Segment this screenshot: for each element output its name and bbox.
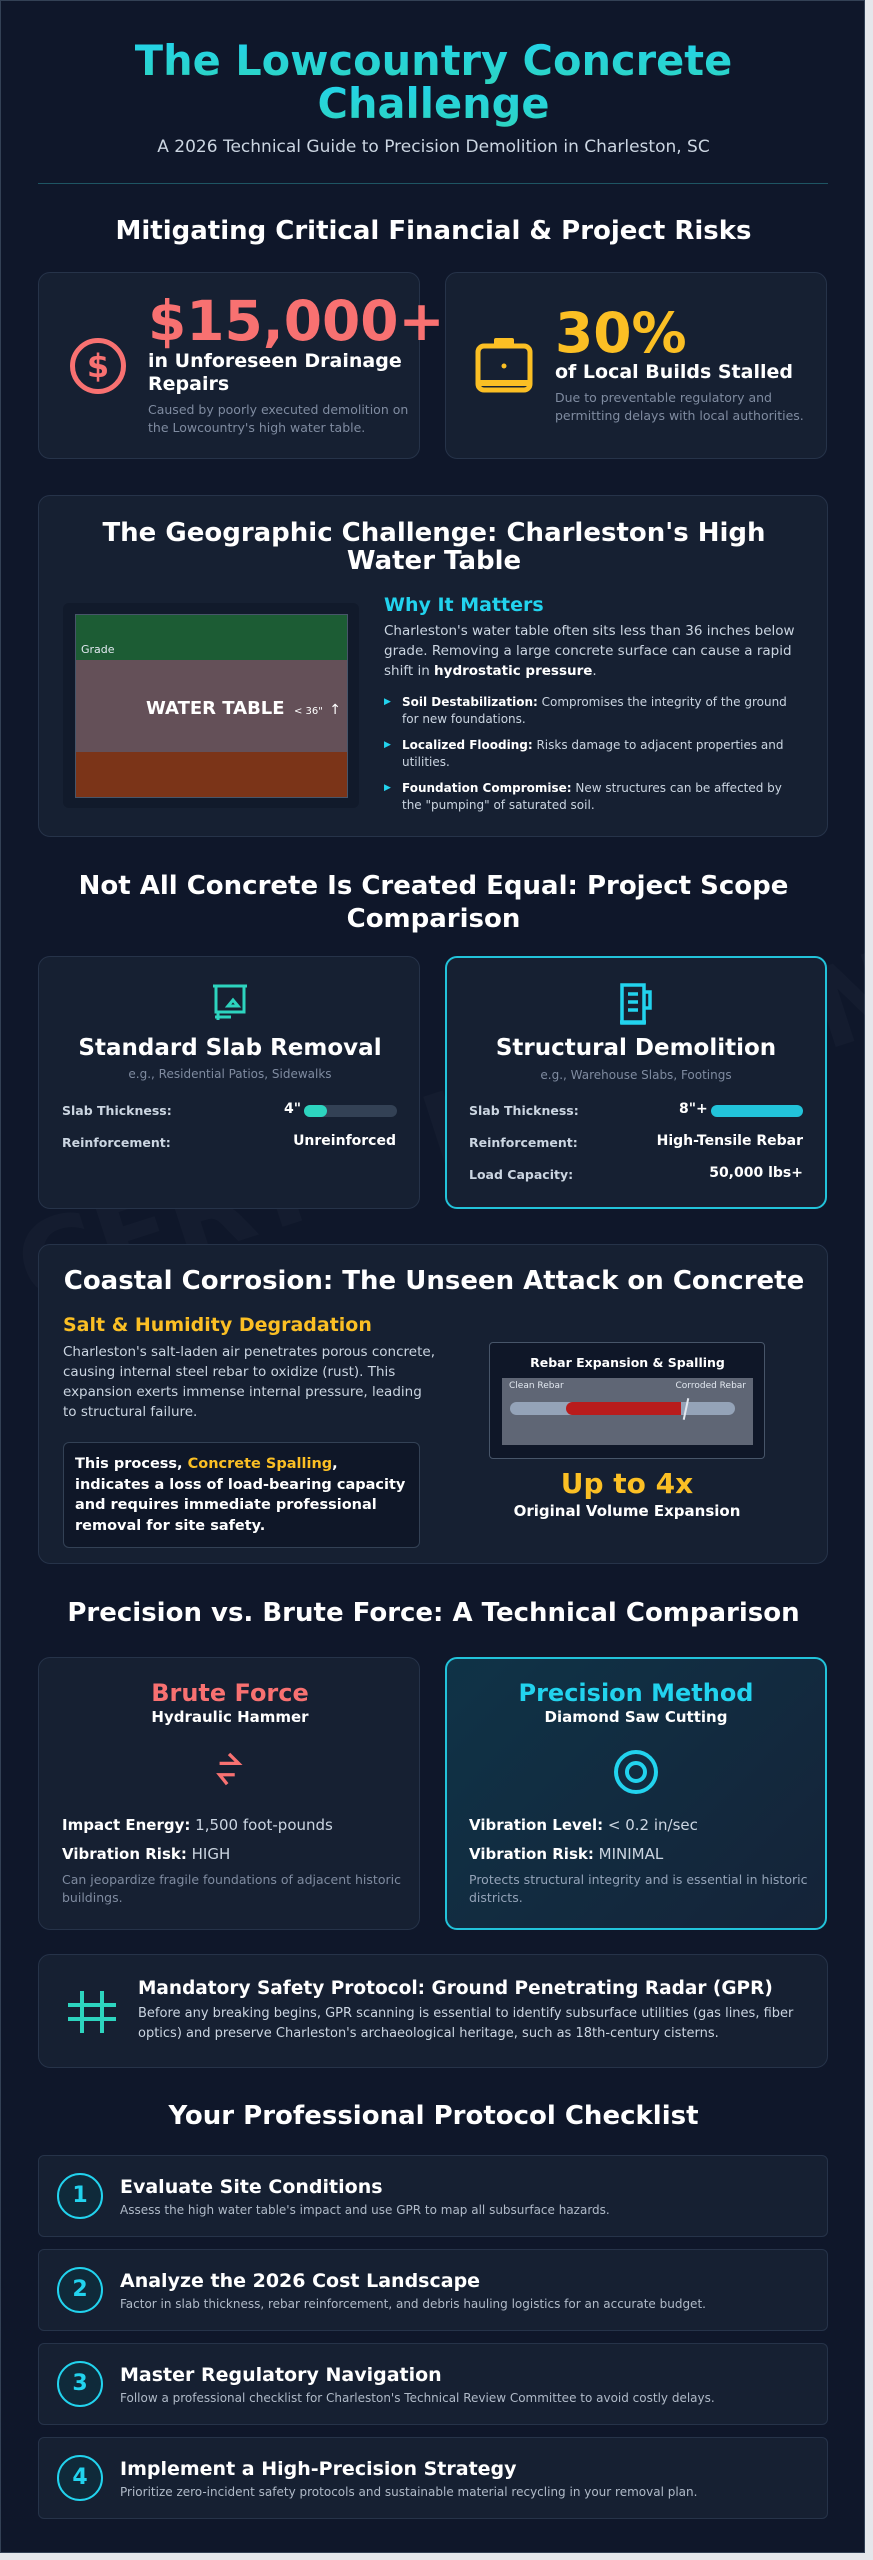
panel: drainage cost <box>38 272 420 459</box>
panel: structural demolition <box>445 956 827 1209</box>
panel: brute force: Brute Force <box>151 1679 309 1707</box>
panel: precision method: Precision Method <box>518 1679 753 1707</box>
diagram: water table: Grade <box>81 643 115 656</box>
panel: structural demolition: Structural Demolition <box>496 1035 776 1061</box>
panel: brute force: Impact Energy: 1,500 foot-pounds <box>62 1816 333 1834</box>
checklist item 2: Factor in slab thickness, rebar reinforcement, and debris hauling logistics for an accurate budget. <box>120 2297 706 2311</box>
text: salt degradation: Salt & Humidity Degradation <box>63 1314 372 1336</box>
heading: risks: Mitigating Critical Financial & Project Risks <box>115 216 752 246</box>
checklist item 1: Evaluate Site Conditions <box>120 2176 383 2198</box>
panel: standard slab: 4" <box>284 1101 301 1117</box>
icon: saw blade <box>614 1750 658 1794</box>
panel: brute force: Vibration Risk: HIGH <box>62 1845 230 1863</box>
panel: GPR protocol: Before any breaking begins, GPR scanning is essential to identify subsurface utilities (gas lines, fiber optics) and preserve Charleston's archaeological heritage, such as 18th-century cisterns. <box>138 2006 793 2041</box>
panel: precision method: Diamond Saw Cutting <box>545 1708 727 1726</box>
heading: checklist: Your Professional Protocol Checklist <box>168 2101 699 2131</box>
panel: brute force <box>38 1657 420 1930</box>
panel: standard slab: e.g., Residential Patios, Sidewalks <box>128 1067 332 1081</box>
chart: rebar expansion: Rebar Expansion & Spalling <box>530 1355 725 1370</box>
panel: standard slab: Slab Thickness: <box>62 1103 172 1118</box>
icon: dollar: $ <box>87 347 109 385</box>
checklist item 1: Assess the high water table's impact and use GPR to map all subsurface hazards. <box>120 2203 610 2217</box>
checklist item 2: 2 <box>72 2277 88 2302</box>
title: Challenge <box>318 79 550 128</box>
checklist item 3 <box>38 2343 828 2425</box>
stat: $15,000+ <box>148 289 445 353</box>
text: why it matters: Localized Flooding: Risks damage to adjacent properties and utilities. <box>402 738 784 769</box>
panel: geographic challenge <box>38 495 828 837</box>
panel: precision method: Protects structural integrity and is essential in historic districts. <box>469 1872 807 1905</box>
panel: structural demolition: 8"+ <box>679 1101 708 1117</box>
panel: structural demolition: High-Tensile Rebar <box>657 1133 803 1149</box>
panel: structural demolition: e.g., Warehouse Slabs, Footings <box>540 1068 732 1082</box>
text: why it matters <box>384 594 795 812</box>
panel: coastal corrosion: Charleston's salt-laden air penetrates porous concrete, causing internal steel rebar to oxidize (rust). This expansion exerts immense internal pressure, leading to structural failure. <box>63 1344 435 1420</box>
panel: standard slab: Reinforcement: <box>62 1135 171 1150</box>
text: why it matters: ▶ <box>384 740 391 750</box>
checklist item 4 <box>38 2437 828 2519</box>
checklist item 3: Master Regulatory Navigation <box>120 2364 442 2386</box>
heading <box>102 518 766 576</box>
callout: spalling <box>63 1442 420 1548</box>
panel: precision method: Vibration Risk: MINIMAL <box>469 1845 663 1863</box>
title: The Lowcountry Concrete <box>135 36 732 85</box>
icon: grid <box>68 1991 116 2033</box>
panel: brute force: Hydraulic Hammer <box>151 1708 309 1726</box>
heading: The Geographic Challenge: Charleston's High <box>102 518 766 548</box>
text: why it matters: Foundation Compromise: New structures can be affected by the "pumping" of saturated soil. <box>402 781 782 812</box>
icon <box>620 983 652 1025</box>
icon <box>213 984 247 1020</box>
diagram: water table <box>63 603 359 808</box>
subtitle: A 2026 Technical Guide to Precision Demolition in Charleston, SC <box>157 137 710 157</box>
checklist item 3: 3 <box>72 2371 88 2396</box>
diagram: water table: WATER TABLE <box>146 698 285 719</box>
icon: briefcase <box>476 338 532 392</box>
panel: stalled builds: of Local Builds Stalled <box>555 361 793 383</box>
checklist item 3: Follow a professional checklist for Charleston's Technical Review Committee to avoid costly delays. <box>120 2391 715 2405</box>
panel: precision method: Vibration Level: < 0.2 in/sec <box>469 1816 698 1834</box>
panel: standard slab: Unreinforced <box>293 1133 396 1149</box>
chart: rebar expansion: Corroded Rebar <box>676 1381 746 1391</box>
checklist item 1: 1 <box>72 2183 88 2208</box>
text: why it matters: Charleston's water table often sits less than 36 inches below grade. Removing a large concrete surface can cause a rapid shift in hydrostatic pressure. <box>384 623 795 679</box>
panel: brute force: Can jeopardize fragile foundations of adjacent historic buildings. <box>62 1872 401 1905</box>
title <box>135 36 732 128</box>
text: why it matters: Soil Destabilization: Compromises the integrity of the ground for new foundations. <box>402 695 787 726</box>
checklist item 1 <box>38 2155 828 2237</box>
panel: structural demolition: Slab Thickness: <box>469 1103 579 1118</box>
checklist item 2: Analyze the 2026 Cost Landscape <box>120 2270 480 2292</box>
panel: coastal corrosion <box>38 1244 828 1564</box>
chart: rebar expansion: Clean Rebar <box>509 1381 564 1391</box>
checklist item 2 <box>38 2249 828 2331</box>
heading: project scope: Comparison <box>347 904 520 934</box>
stat: 4x: Up to 4x <box>561 1467 693 1500</box>
heading: project scope: Not All Concrete Is Created Equal: Project Scope <box>79 871 788 901</box>
panel: drainage cost: in Unforeseen Drainage Repairs <box>148 350 402 395</box>
panel: stalled builds: Due to preventable regulatory and permitting delays with local authorities. <box>555 390 804 423</box>
panel: GPR protocol: Mandatory Safety Protocol: Ground Penetrating Radar (GPR) <box>138 1978 773 1999</box>
panel: standard slab <box>38 956 420 1209</box>
panel: structural demolition: Reinforcement: <box>469 1135 578 1150</box>
icon: dollar <box>70 338 126 394</box>
text: why it matters: ▶ <box>384 697 391 707</box>
panel: stalled builds <box>445 272 827 459</box>
panel: coastal corrosion: Original Volume Expansion <box>514 1502 740 1520</box>
heading: Coastal Corrosion: The Unseen Attack on Concrete <box>64 1266 804 1296</box>
icon: arrows <box>216 1752 242 1786</box>
text: why it matters: Why It Matters <box>384 594 544 616</box>
checklist item 4: Prioritize zero-incident safety protocols and sustainable material recycling in your removal plan. <box>120 2485 697 2499</box>
diagram: water table: < 36" ↑ <box>294 702 341 718</box>
checklist item 4: 4 <box>72 2465 88 2490</box>
text: why it matters: ▶ <box>384 783 391 793</box>
callout: spalling: This process, Concrete Spalling, indicates a loss of load-bearing capacity and requires immediate professional removal for site safety. <box>75 1456 405 1534</box>
checklist item 4: Implement a High-Precision Strategy <box>120 2458 517 2480</box>
heading: project scope <box>79 871 788 934</box>
panel: structural demolition: 50,000 lbs+ <box>709 1165 803 1181</box>
panel: structural demolition: Load Capacity: <box>469 1167 573 1182</box>
chart: rebar expansion <box>489 1342 765 1459</box>
panel: GPR protocol <box>38 1954 828 2068</box>
heading: Water Table <box>347 546 521 576</box>
panel: precision method <box>445 1657 827 1930</box>
panel: standard slab: Standard Slab Removal <box>78 1035 382 1061</box>
stat: 30% <box>555 301 687 365</box>
heading: precision vs brute: Precision vs. Brute Force: A Technical Comparison <box>67 1598 800 1628</box>
panel: drainage cost: Caused by poorly executed demolition on the Lowcountry's high water table. <box>148 402 408 435</box>
